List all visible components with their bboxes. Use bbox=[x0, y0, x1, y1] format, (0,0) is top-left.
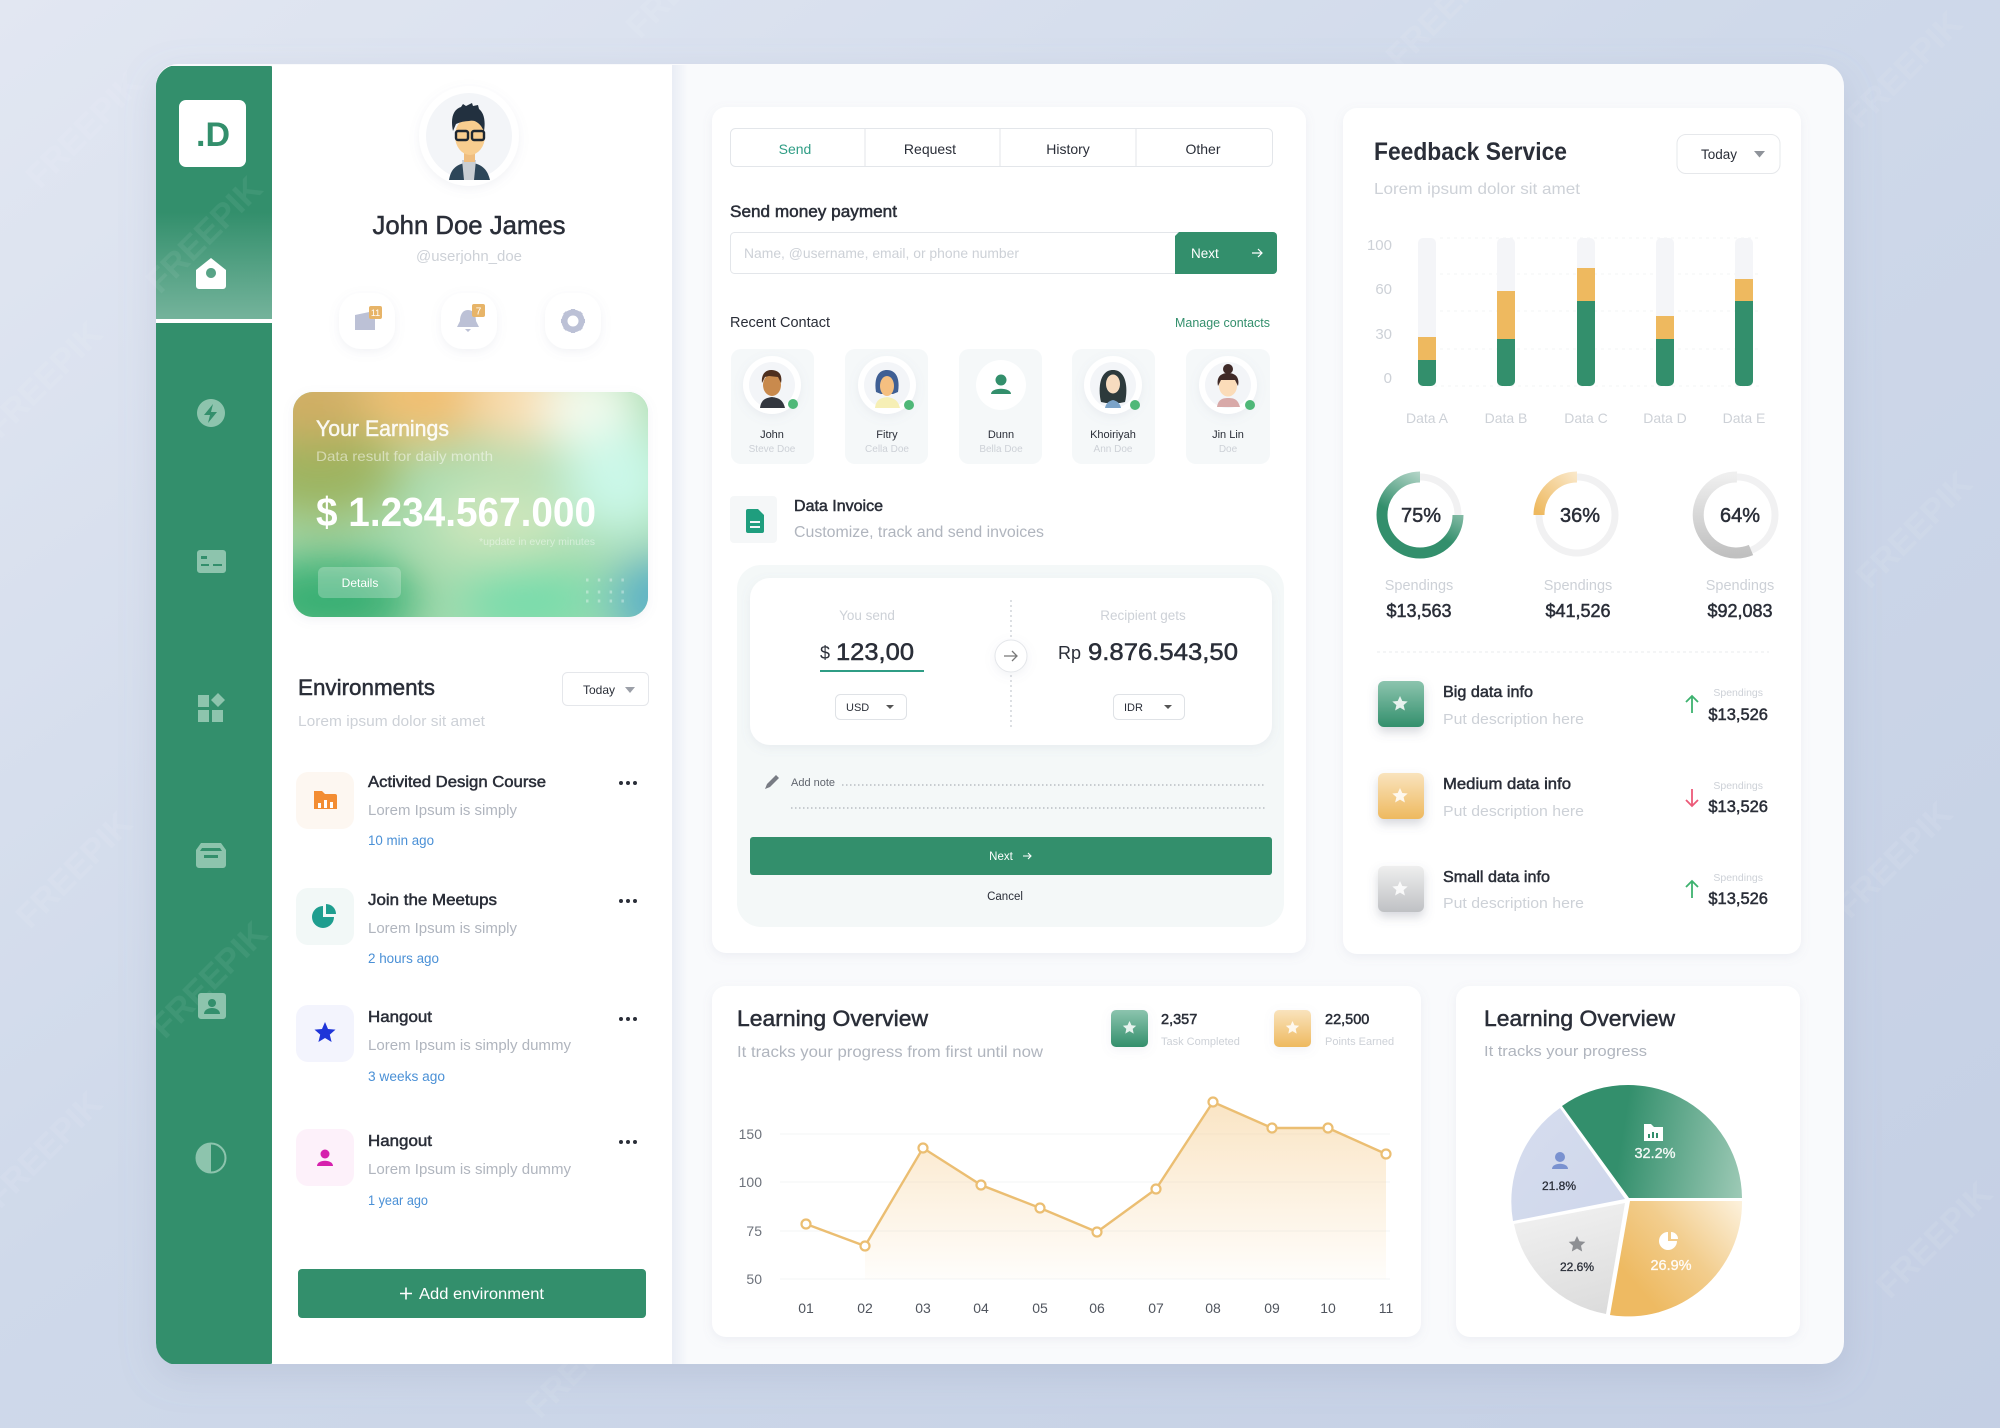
line chart: 03 bbox=[915, 1300, 931, 1316]
donut: 64%: $92,083 bbox=[1707, 601, 1773, 621]
send money heading: Send money payment bbox=[730, 203, 897, 221]
list item: hangout two: Lorem Ipsum is simply dummy bbox=[368, 1161, 571, 1178]
list item: hangout two bbox=[296, 1129, 637, 1208]
row: small data info: $13,526 bbox=[1708, 890, 1768, 908]
list item: hangout two: Hangout bbox=[368, 1133, 433, 1150]
cancel link: Cancel bbox=[987, 891, 1023, 903]
feedback subtitle: Lorem ipsum dolor sit amet bbox=[1374, 181, 1581, 198]
panel: send money bbox=[712, 107, 1306, 953]
slice: 32.2% bbox=[1562, 1085, 1742, 1198]
recipient gets: Recipient gets bbox=[1100, 608, 1186, 623]
row: medium data info bbox=[1378, 773, 1768, 820]
line chart subtitle: It tracks your progress from first until now bbox=[737, 1044, 1044, 1061]
stat: points earned: Points Earned bbox=[1325, 1036, 1394, 1048]
list item: hangout one: Hangout bbox=[368, 1009, 433, 1026]
line chart: 04 bbox=[973, 1300, 989, 1316]
list item: meetups: Lorem Ipsum is simply bbox=[368, 920, 517, 937]
donut: 64%: 64% bbox=[1720, 505, 1760, 527]
row: medium data info: Spendings bbox=[1713, 780, 1763, 792]
logo: .D bbox=[196, 116, 230, 154]
line chart: 07 bbox=[1148, 1300, 1164, 1316]
list item: hangout two: 1 year ago bbox=[368, 1193, 428, 1208]
stat: tasks completed bbox=[1111, 1010, 1240, 1048]
pie subtitle: It tracks your progress bbox=[1484, 1043, 1647, 1060]
row: big data info: Put description here bbox=[1443, 711, 1584, 728]
row: big data info bbox=[1378, 681, 1768, 728]
panel: learning overview pie bbox=[1456, 986, 1800, 1337]
bar: Data A bbox=[1418, 238, 1436, 386]
row: small data info: Spendings bbox=[1713, 872, 1763, 884]
input with next button: Next bbox=[1191, 246, 1219, 261]
background watermarks: FREEPIK bbox=[1849, 464, 1980, 596]
stacked bar chart: Data C bbox=[1564, 410, 1608, 426]
stacked bar chart bbox=[1367, 237, 1765, 426]
user avatar bbox=[419, 86, 519, 186]
background watermarks: FREEPIK bbox=[1829, 794, 1960, 926]
list item: design course: Activited Design Course bbox=[368, 774, 546, 791]
user handle: @userjohn_doe bbox=[416, 248, 522, 265]
button: notifications: 7 bbox=[476, 306, 482, 318]
pie chart bbox=[1511, 1085, 1742, 1316]
donut: 36%: Spendings bbox=[1544, 578, 1612, 594]
line chart: 02 bbox=[857, 1300, 873, 1316]
icon: widgets bbox=[198, 693, 225, 722]
contact: Jin Lin bbox=[1186, 349, 1270, 464]
contact: Khoiriyah: Khoiriyah bbox=[1090, 429, 1136, 441]
row: small data info bbox=[1378, 866, 1768, 912]
data invoice: Data Invoice bbox=[794, 498, 883, 515]
tabs bbox=[730, 128, 1272, 166]
icon: card bbox=[197, 550, 226, 573]
donut: 75%: $13,563 bbox=[1386, 601, 1452, 621]
background watermarks: FREEPIK bbox=[1839, 4, 1970, 136]
list item: meetups: Join the Meetups bbox=[368, 892, 497, 909]
stacked bar chart: Data B bbox=[1485, 410, 1527, 426]
slice: 22.6% bbox=[1514, 1203, 1625, 1314]
contact: Fitry: Fitry bbox=[876, 429, 898, 441]
slice: 26.9%: 26.9% bbox=[1650, 1258, 1692, 1274]
logo bbox=[179, 100, 246, 167]
dropdown: today bbox=[1677, 134, 1780, 174]
line chart: 01 bbox=[798, 1300, 814, 1316]
donut: 75%: Spendings bbox=[1385, 578, 1453, 594]
line chart: 08 bbox=[1205, 1300, 1221, 1316]
row: small data info: Small data info bbox=[1443, 869, 1550, 886]
add note: Add note bbox=[791, 777, 835, 789]
background watermarks: FREEPIK bbox=[9, 804, 140, 936]
row: big data info: Big data info bbox=[1443, 684, 1533, 701]
user name: John Doe James bbox=[372, 210, 566, 240]
dropdown: today bbox=[562, 672, 648, 706]
slice: 26.9% bbox=[1610, 1201, 1742, 1316]
donut: 64% bbox=[1698, 477, 1775, 621]
recipient gets bbox=[1058, 608, 1238, 720]
line chart: 75 bbox=[746, 1223, 762, 1239]
row: small data info: Put description here bbox=[1443, 895, 1584, 912]
background watermarks: FREEPIK bbox=[19, 64, 150, 196]
arrow divider bbox=[995, 600, 1027, 727]
you send: $ bbox=[820, 643, 830, 663]
slice: 21.8%: 21.8% bbox=[1542, 1179, 1576, 1193]
tabs: Send bbox=[779, 141, 811, 157]
button: settings bbox=[545, 293, 601, 349]
bar: Data B bbox=[1497, 238, 1515, 386]
contact: Jin Lin: Doe bbox=[1219, 444, 1238, 455]
contact: Fitry bbox=[845, 349, 928, 464]
manage contacts link: Manage contacts bbox=[1175, 315, 1270, 330]
earnings card: Your Earnings bbox=[316, 416, 449, 441]
earnings card: *update in every minutes bbox=[479, 536, 595, 548]
panel: profile column bbox=[293, 65, 680, 1364]
slice: 21.8% bbox=[1511, 1108, 1625, 1221]
icon: home bbox=[196, 258, 226, 289]
pie heading: Learning Overview bbox=[1484, 1006, 1675, 1031]
line chart: 100 bbox=[739, 1174, 762, 1190]
dropdown: today: Today bbox=[583, 683, 615, 697]
donut: 36%: 36% bbox=[1560, 505, 1600, 527]
list item: meetups: 2 hours ago bbox=[368, 951, 439, 966]
panel: navigation sidebar: FREEPIK bbox=[144, 914, 275, 1046]
button: next bbox=[750, 837, 1272, 875]
panel: navigation sidebar: FREEPIK bbox=[139, 169, 270, 301]
recipient gets: 9.876.543,50 bbox=[1088, 639, 1238, 666]
contact: Fitry: Cella Doe bbox=[865, 444, 909, 455]
contact: Khoiriyah bbox=[1072, 349, 1155, 464]
contact: Dunn: Dunn bbox=[988, 429, 1014, 441]
you send: USD bbox=[846, 702, 869, 714]
line chart: 50 bbox=[746, 1271, 762, 1287]
row: big data info: Spendings bbox=[1713, 687, 1763, 699]
contact: John bbox=[731, 349, 814, 464]
input with next button bbox=[730, 232, 1277, 274]
button: next: Next bbox=[989, 851, 1014, 863]
dashboard main panel bbox=[156, 64, 1844, 1364]
contact: Dunn: Bella Doe bbox=[979, 444, 1023, 455]
list item: meetups bbox=[296, 888, 637, 966]
background watermarks: FREEPIK bbox=[1869, 1174, 2000, 1306]
bar: Data E bbox=[1735, 238, 1753, 386]
list item: hangout one: 3 weeks ago bbox=[368, 1069, 445, 1084]
line chart: 05 bbox=[1032, 1300, 1048, 1316]
stat: tasks completed: Task Completed bbox=[1161, 1036, 1240, 1048]
line chart bbox=[739, 1098, 1393, 1316]
contact: Dunn bbox=[959, 349, 1042, 464]
bar: Data C bbox=[1577, 238, 1595, 386]
donut: 36%: $41,526 bbox=[1545, 601, 1611, 621]
stacked bar chart: 60 bbox=[1375, 281, 1392, 298]
line chart: 11 bbox=[1379, 1300, 1393, 1316]
button: add environment bbox=[298, 1269, 646, 1318]
line chart heading: Learning Overview bbox=[737, 1006, 928, 1031]
bar: Data D bbox=[1656, 238, 1674, 386]
button: messages: 11 bbox=[371, 308, 380, 318]
stacked bar chart: Data D bbox=[1643, 410, 1687, 426]
list item: hangout one: Lorem Ipsum is simply dummy bbox=[368, 1037, 571, 1054]
input with next button: Name, @username, email, or phone number bbox=[744, 245, 1019, 261]
dropdown: today: Today bbox=[1701, 147, 1737, 162]
line chart: 10 bbox=[1320, 1300, 1336, 1316]
line chart: 06 bbox=[1089, 1300, 1105, 1316]
recent contact heading: Recent Contact bbox=[730, 315, 830, 331]
add note bbox=[765, 775, 1266, 808]
contact: John: Steve Doe bbox=[749, 444, 796, 455]
you send bbox=[820, 608, 924, 720]
row: big data info: $13,526 bbox=[1708, 706, 1768, 724]
background watermarks: FREEPIK bbox=[519, 1294, 650, 1426]
panel: navigation sidebar bbox=[156, 66, 272, 1364]
stacked bar chart: 0 bbox=[1384, 370, 1392, 387]
tabs: Request bbox=[904, 141, 956, 157]
earnings card: $ 1.234.567.000 bbox=[316, 489, 596, 535]
contact: Jin Lin: Jin Lin bbox=[1212, 429, 1244, 441]
you send: 123,00 bbox=[836, 639, 914, 666]
you send: You send bbox=[839, 608, 895, 623]
list item: design course: Lorem Ipsum is simply bbox=[368, 802, 517, 819]
data invoice: Customize, track and send invoices bbox=[794, 524, 1044, 541]
panel: feedback service bbox=[1343, 108, 1801, 954]
tabs: History bbox=[1046, 141, 1090, 157]
slice: 22.6%: 22.6% bbox=[1560, 1260, 1594, 1274]
button: messages bbox=[339, 293, 395, 349]
icon: contact book bbox=[198, 993, 226, 1019]
row: medium data info: $13,526 bbox=[1708, 798, 1768, 816]
stat: points earned bbox=[1274, 1010, 1394, 1048]
row: medium data info: Medium data info bbox=[1443, 776, 1571, 793]
environments heading: Environments bbox=[298, 675, 435, 700]
earnings card bbox=[293, 392, 648, 618]
list item: hangout one bbox=[296, 1005, 637, 1084]
environments subtitle: Lorem ipsum dolor sit amet bbox=[298, 713, 486, 730]
contact: John: John bbox=[760, 429, 784, 441]
line chart: 150 bbox=[739, 1126, 762, 1142]
earnings card: Details bbox=[342, 576, 378, 590]
list item: design course: 10 min ago bbox=[368, 833, 434, 848]
stat: tasks completed: 2,357 bbox=[1161, 1012, 1197, 1028]
donut: 36% bbox=[1539, 477, 1615, 621]
stat: points earned: 22,500 bbox=[1325, 1012, 1369, 1028]
donut: 75%: 75% bbox=[1401, 505, 1441, 527]
earnings card: Data result for daily month bbox=[316, 448, 493, 464]
stacked bar chart: Data A bbox=[1406, 410, 1449, 426]
contact: Khoiriyah: Ann Doe bbox=[1094, 444, 1133, 455]
panel: learning overview line chart bbox=[712, 986, 1421, 1337]
donut: 75% bbox=[1382, 477, 1458, 621]
slice: 32.2%: 32.2% bbox=[1634, 1146, 1676, 1162]
button: add environment: Add environment bbox=[419, 1286, 545, 1303]
recipient gets: IDR bbox=[1124, 702, 1143, 714]
feedback heading: Feedback Service bbox=[1374, 138, 1567, 166]
icon: lightning bbox=[197, 399, 225, 427]
button: notifications bbox=[441, 293, 497, 349]
converter panel bbox=[737, 565, 1284, 927]
row: medium data info: Put description here bbox=[1443, 803, 1584, 820]
data invoice bbox=[730, 496, 1044, 543]
line chart: 09 bbox=[1264, 1300, 1280, 1316]
icon: contrast bbox=[196, 1144, 226, 1172]
stacked bar chart: 30 bbox=[1375, 326, 1392, 343]
donut: 64%: Spendings bbox=[1706, 578, 1774, 594]
icon: archive bbox=[196, 843, 226, 868]
recipient gets: Rp bbox=[1058, 643, 1081, 663]
stacked bar chart: 100 bbox=[1367, 237, 1392, 254]
list item: design course bbox=[296, 772, 637, 848]
tabs: Other bbox=[1185, 141, 1221, 157]
stacked bar chart: Data E bbox=[1723, 410, 1765, 426]
